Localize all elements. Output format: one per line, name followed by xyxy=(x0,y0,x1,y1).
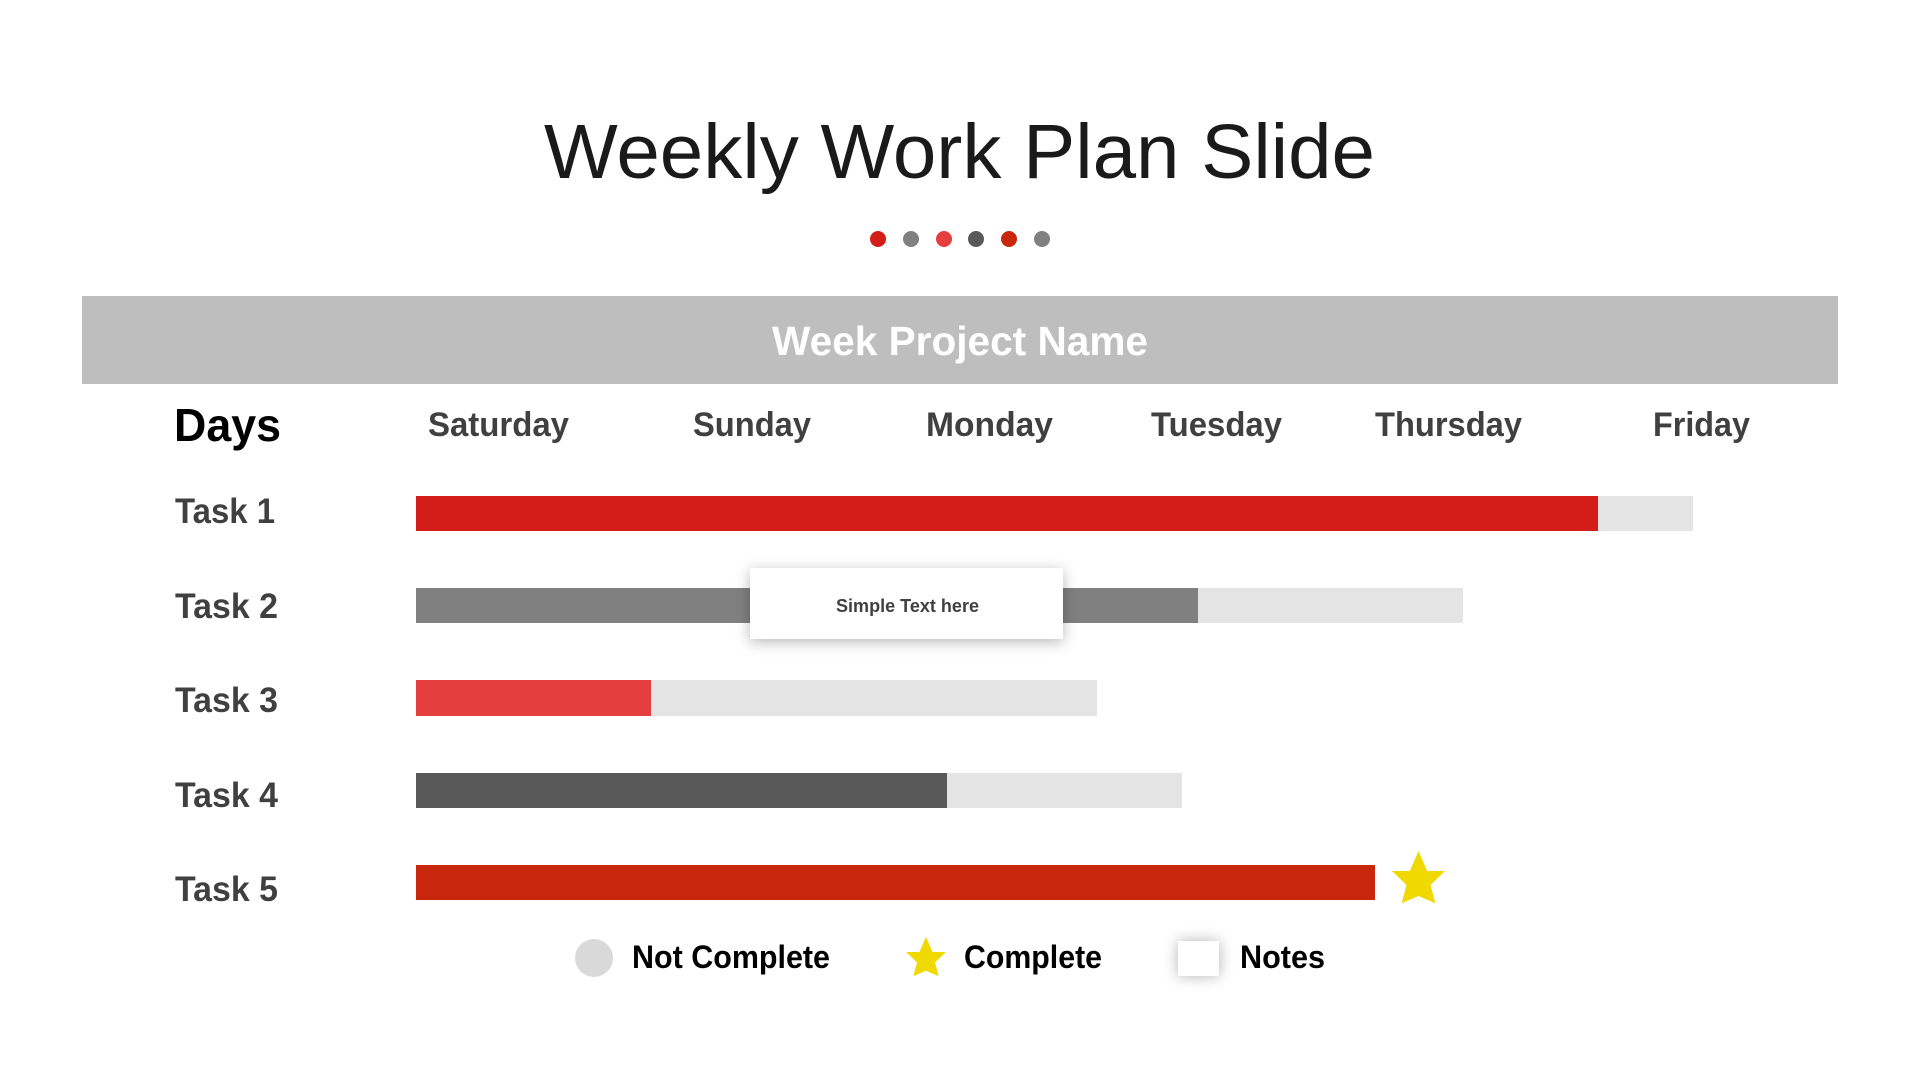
task 4 row xyxy=(175,773,1182,815)
legend: complete xyxy=(906,937,1102,976)
day labels: Monday xyxy=(926,406,1053,444)
legend: complete: Complete xyxy=(964,939,1102,975)
icon: task 5 complete star xyxy=(1392,851,1445,903)
legend: notes: Notes xyxy=(1240,939,1325,975)
legend: not complete: Not Complete xyxy=(632,939,830,975)
day labels: Sunday xyxy=(693,406,811,444)
decorative dot row xyxy=(870,231,1050,247)
task 3 row: Task 3 xyxy=(175,681,278,720)
day labels: Thursday xyxy=(1375,406,1522,444)
title: Weekly Work Plan Slide xyxy=(544,109,1375,195)
callout: simple text note xyxy=(750,568,1063,639)
task 5 row xyxy=(175,865,1375,909)
task 1 row: Task 1 xyxy=(175,492,275,531)
banner: week project name xyxy=(82,296,1838,384)
day labels xyxy=(428,406,1750,444)
day labels: Friday xyxy=(1653,406,1750,444)
banner: week project name: Week Project Name xyxy=(772,318,1148,364)
task 2 row: Task 2 xyxy=(175,587,278,626)
day labels: Tuesday xyxy=(1151,406,1282,444)
day labels: Saturday xyxy=(428,406,569,444)
legend: notes xyxy=(1178,939,1325,976)
task 5 row: Task 5 xyxy=(175,870,278,909)
heading: days: Days xyxy=(174,399,281,451)
task 4 row: Task 4 xyxy=(175,776,279,815)
task 1 row xyxy=(175,492,1693,531)
callout: simple text note: Simple Text here xyxy=(836,596,979,616)
task 3 row xyxy=(175,680,1097,720)
task 2 row xyxy=(175,587,1463,626)
